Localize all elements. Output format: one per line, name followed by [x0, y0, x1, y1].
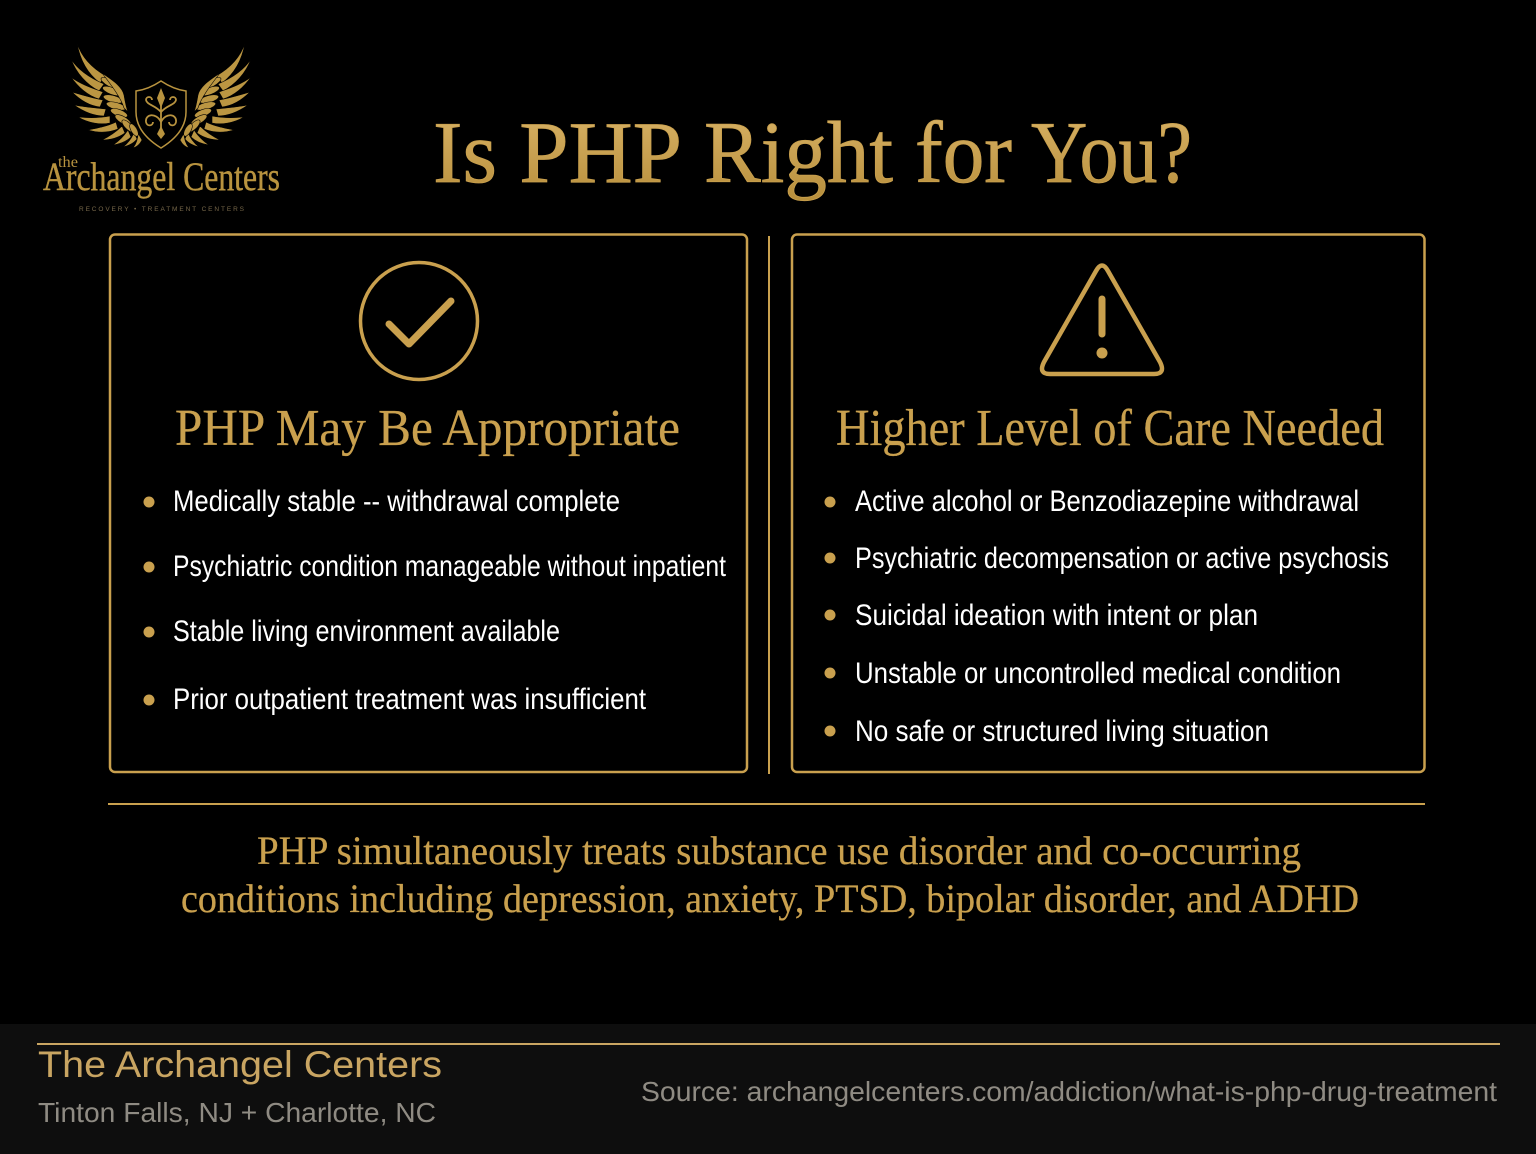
icon: right wing — [180, 43, 251, 148]
logo: The Archangel Centers — [43, 43, 280, 213]
icon: warning triangle — [1042, 266, 1162, 374]
list: appropriate criteria: Psychiatric condition manageable without inpatient — [173, 550, 727, 583]
panel: higher level of care needed — [792, 234, 1424, 772]
title: for — [915, 105, 1012, 202]
title: Right — [704, 105, 893, 202]
logo wordmark: Archangel Centers — [43, 154, 280, 199]
list: appropriate criteria: Medically stable -- withdrawal complete — [173, 485, 620, 518]
title — [433, 105, 1192, 202]
footer — [0, 1024, 1536, 1154]
logo tagline: RECOVERY • TREATMENT CENTERS — [79, 206, 245, 213]
list: appropriate criteria — [144, 485, 727, 716]
list: higher care criteria: Psychiatric decompensation or active psychosis — [855, 542, 1389, 575]
summary note: PHP simultaneously treats substance use disorder and co-occurring — [257, 828, 1301, 873]
footer organization name: The Archangel Centers — [38, 1044, 442, 1085]
list: higher care criteria — [824, 485, 1389, 748]
logo small word: the: the — [58, 154, 78, 171]
title: Is PHP — [433, 105, 682, 202]
icon: shield with fleur — [136, 81, 186, 148]
list: appropriate criteria: Prior outpatient treatment was insufficient — [173, 683, 647, 716]
footer locations: Tinton Falls, NJ + Charlotte, NC — [38, 1097, 436, 1128]
summary note — [181, 828, 1359, 921]
footer source: Source: archangelcenters.com/addiction/what-is-php-drug-treatment — [641, 1076, 1497, 1107]
icon: check mark in circle — [360, 262, 478, 380]
icon: left wing — [71, 43, 142, 148]
panel heading: PHP May Be Appropriate — [175, 400, 680, 457]
list: appropriate criteria: Stable living environment available — [173, 615, 560, 648]
list: higher care criteria: Active alcohol or Benzodiazepine withdrawal — [855, 485, 1359, 518]
list: higher care criteria: Suicidal ideation with intent or plan — [855, 599, 1258, 632]
summary note: conditions including depression, anxiety, PTSD, bipolar disorder, and ADHD — [181, 876, 1359, 921]
list: higher care criteria: No safe or structured living situation — [855, 715, 1269, 748]
panel: PHP may be appropriate — [110, 234, 747, 772]
panel heading: Higher Level of Care Needed — [836, 400, 1384, 457]
title: You? — [1031, 105, 1192, 202]
list: higher care criteria: Unstable or uncontrolled medical condition — [855, 657, 1341, 690]
